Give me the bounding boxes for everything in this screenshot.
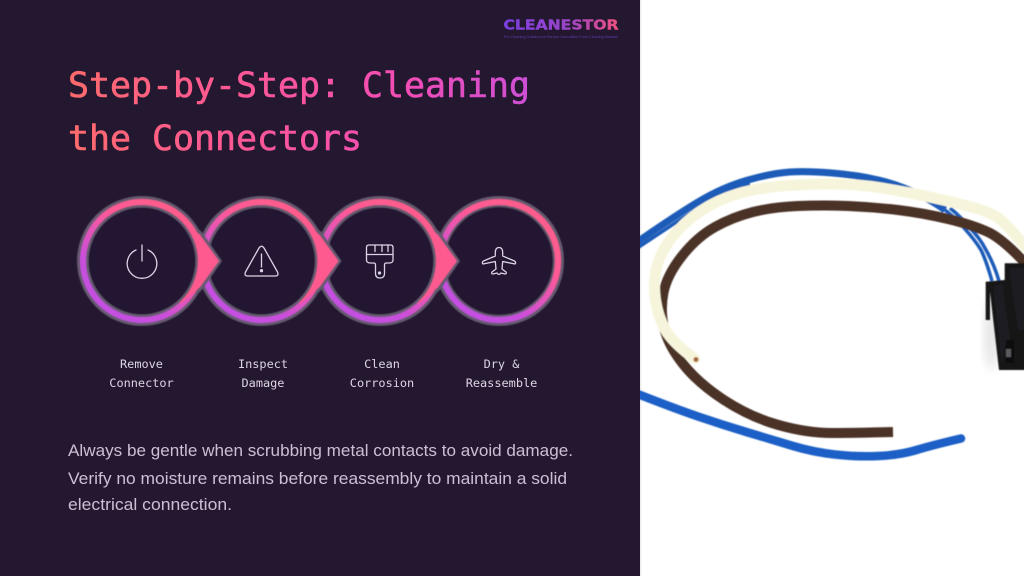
title: the Connectors — [68, 119, 362, 159]
wire: brown — [662, 206, 1024, 433]
step 1: remove connector — [82, 202, 220, 320]
icon: paint brush — [366, 245, 393, 278]
label: clean corrosion: Clean — [364, 357, 400, 371]
label: dry and reassemble: Reassemble — [466, 376, 537, 390]
connector housing — [986, 263, 1024, 370]
body text — [68, 442, 573, 514]
icon: power button — [127, 245, 157, 278]
label: inspect damage: Damage — [242, 376, 284, 390]
panel: connector photo — [630, 0, 1024, 576]
process diagram: four steps — [82, 202, 558, 320]
label: remove connector: Remove — [120, 357, 163, 371]
step 2: inspect damage — [202, 202, 340, 320]
icon: warning triangle — [245, 246, 278, 276]
icon: airplane — [482, 248, 516, 274]
wire: upper blue — [630, 172, 945, 247]
logo — [504, 18, 618, 39]
label: remove connector: Connector — [109, 376, 174, 390]
step labels — [109, 357, 537, 390]
step 4: dry and reassemble — [440, 202, 558, 320]
step 3: clean corrosion — [320, 202, 458, 320]
wire tip: copper core — [692, 355, 701, 364]
label: inspect damage: Inspect — [238, 357, 288, 371]
body text: electrical connection. — [68, 496, 232, 514]
body text: Verify no moisture remains before reassembly to maintain a solid — [68, 470, 567, 488]
body text: Always be gentle when scrubbing metal contacts to avoid damage. — [68, 442, 573, 460]
label: clean corrosion: Corrosion — [350, 376, 414, 390]
logo: Pro Cleaning Guides And Service Journalism From Cleaning Masters — [504, 35, 618, 39]
logo: CLEANESTOR — [504, 18, 618, 34]
wire: cream — [654, 184, 1024, 359]
label: dry and reassemble: Dry & — [484, 357, 520, 371]
title — [68, 66, 530, 159]
panel: dark background — [0, 0, 640, 576]
title: Step-by-Step: Cleaning — [68, 66, 530, 106]
wire: lower blue — [630, 391, 961, 456]
